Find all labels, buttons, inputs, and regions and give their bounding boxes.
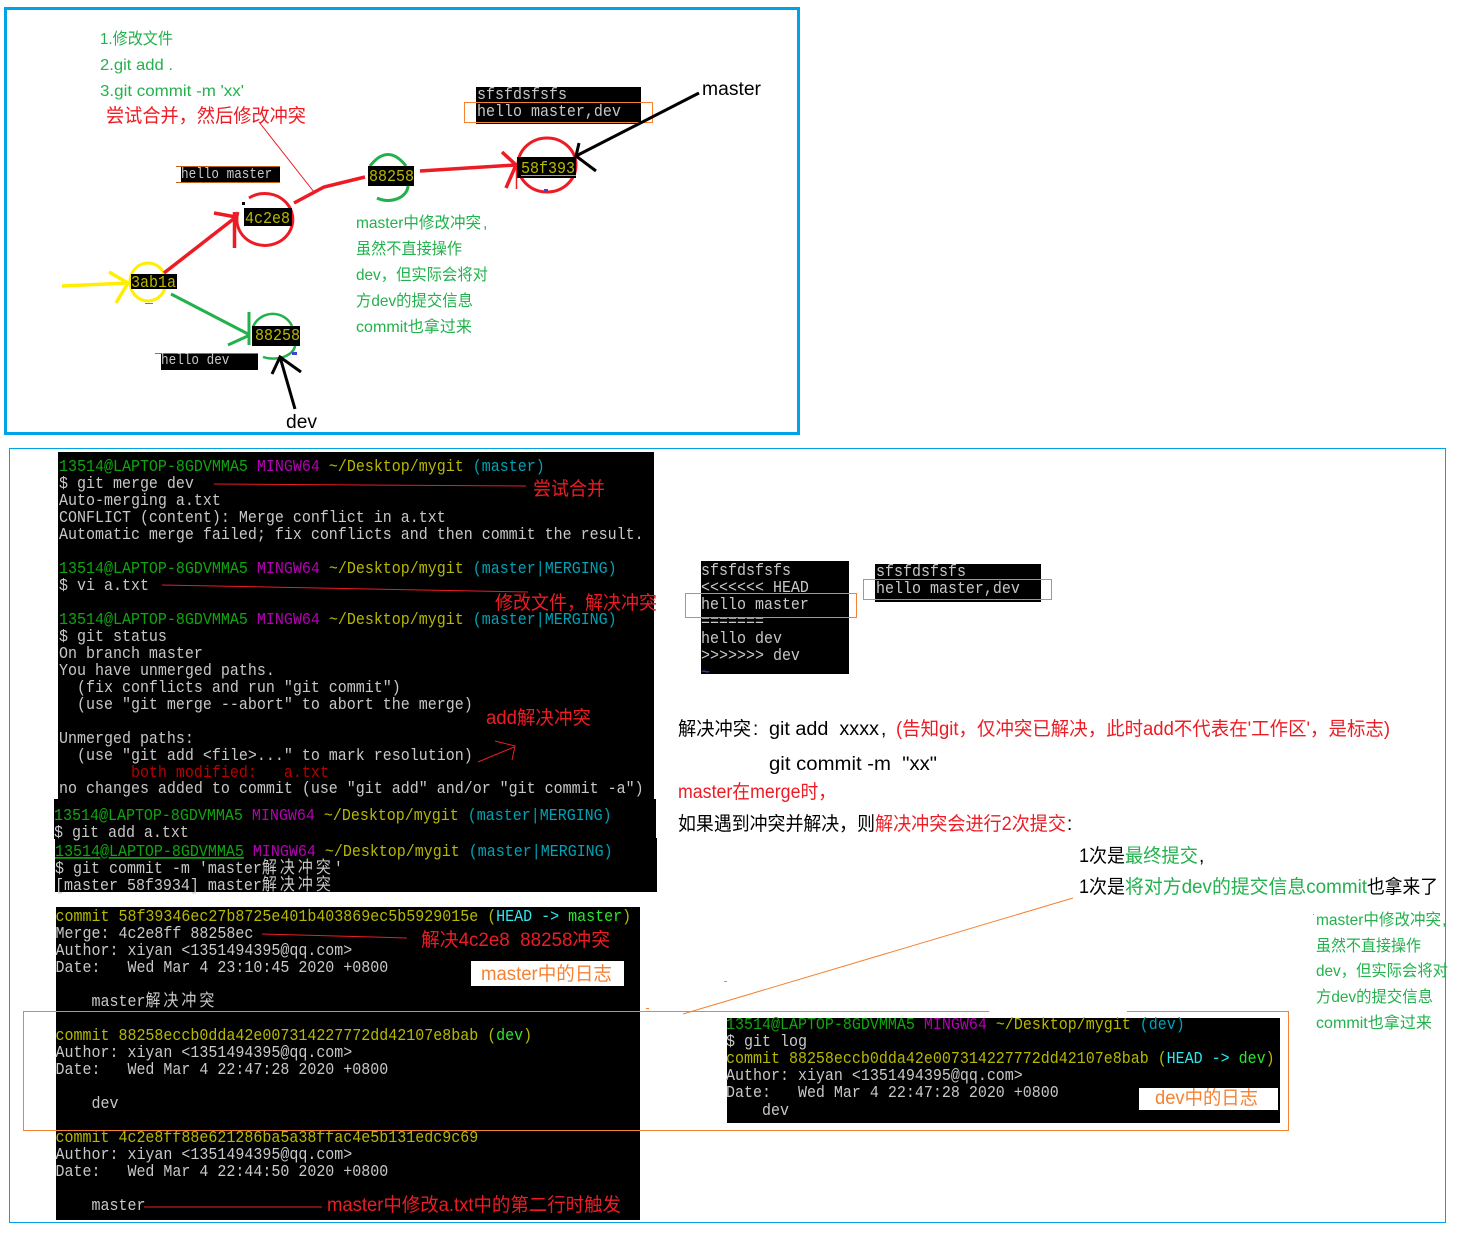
node: commit 3ab1a — [130, 263, 177, 304]
file content: conflict markers: >>>>>>> dev — [701, 646, 800, 665]
file content: conflict markers: sfsfdsfsfs — [701, 561, 791, 580]
file content: resolved result — [864, 562, 1052, 602]
text: master conflict note — [356, 214, 488, 336]
terminal: git merge and status: On branch master — [59, 644, 203, 663]
terminal: git merge and status — [58, 452, 654, 800]
annotation: resolves 4c2e8 and 88258 — [262, 929, 610, 951]
text: how to resolve: : — [753, 719, 758, 740]
terminal: master git log: Author: xiyan <1351494395@qq.com> — [56, 1145, 352, 1164]
text: two commits explanation: : — [1067, 814, 1072, 835]
text: master conflict note: 方dev的提交信息 — [356, 292, 473, 310]
file content: conflict markers: ======= — [701, 612, 764, 631]
terminal: master git log: master — [56, 1196, 145, 1215]
annotation: add resolves conflict — [478, 707, 591, 762]
terminal: git add and commit: 13514@LAPTOP-8GDVMMA5 MINGW64 ~/Desktop/mygit (master|MERGING) — [55, 842, 613, 861]
text: master conflict note repeated: , — [1442, 912, 1446, 929]
terminal: dev git log: 13514@LAPTOP-8GDVMMA5 MINGW64 ~/Desktop/mygit (dev) — [726, 1015, 1185, 1034]
arrow: red 4c2e8 to 88258 — [294, 177, 365, 203]
text: how to resolve — [678, 718, 1390, 775]
node: commit 4c2e8 — [237, 193, 293, 245]
text: workflow steps: 2.git add . — [100, 57, 173, 74]
file content: merged result: sfsfdsfsfs — [477, 85, 567, 104]
terminal: master git log: Date: Wed Mar 4 22:44:50 2020 +0800 — [56, 1162, 388, 1181]
terminal: git merge and status: $ git status — [59, 627, 167, 646]
text: two commits explanation: 也拿来了 — [1367, 875, 1438, 898]
text: master conflict note: master中修改冲突 — [356, 214, 481, 232]
terminal: git merge and status: (fix conflicts and run "git commit") — [59, 678, 401, 697]
file content: resolved result: sfsfdsfsfs — [876, 562, 966, 581]
text: two commits explanation: 如果遇到冲突并解决，则 — [678, 813, 875, 835]
file content: conflict markers — [686, 561, 856, 682]
text: workflow steps: 1.修改文件 — [100, 30, 173, 48]
terminal: git merge and status: $ git merge dev — [59, 474, 194, 493]
terminal: master git log: Date: Wed Mar 4 22:47:28 2020 +0800 — [56, 1060, 388, 1079]
arrow: red 88258 to 58f393 — [420, 152, 516, 189]
arrow: dev pointer — [272, 357, 301, 409]
arrow: green to dev commit — [171, 294, 250, 345]
arrow: red to 4c2e8 — [164, 212, 236, 273]
heading: try merge then fix conflict: 尝试合并，然后修改冲突 — [106, 105, 306, 127]
terminal: dev git log: Author: xiyan <1351494395@qq.com> — [726, 1066, 1023, 1085]
terminal: master git log: commit 88258eccb0dda42e007314227772dd42107e8bab (dev) — [56, 1026, 532, 1045]
text: two commits explanation — [678, 781, 1438, 898]
label: dev: dev — [286, 412, 317, 433]
annotation: edit file to fix conflict: 修改文件，解决冲突 — [495, 592, 657, 614]
text: master conflict note: , — [483, 215, 487, 232]
file content: conflict markers: <<<<<<< HEAD — [701, 578, 809, 597]
text: workflow steps: 3.git commit -m 'xx' — [100, 83, 244, 100]
connector: note to shared commit — [646, 898, 1314, 1014]
terminal: git add and commit: [master 58f3934] master解决冲突 — [55, 875, 334, 895]
text: two commits explanation: 最终提交 — [1125, 845, 1198, 867]
text: two commits explanation: , — [1199, 846, 1204, 867]
terminal: git merge and status: Automatic merge failed; fix conflicts and then commit the result. — [59, 525, 644, 544]
node: commit 4c2e8: 4c2e8 — [245, 209, 290, 228]
text: two commits explanation: master在merge时， — [678, 781, 836, 803]
terminal: dev git log: $ git log — [726, 1032, 807, 1051]
text: how to resolve: , — [881, 719, 886, 740]
node: commit 88258 on master — [368, 154, 414, 200]
annotation: add resolves conflict: add解决冲突 — [486, 707, 591, 729]
terminal: dev git log: Date: Wed Mar 4 22:47:28 2020 +0800 — [726, 1083, 1059, 1102]
text: two commits explanation: 1次是 — [1079, 845, 1125, 867]
terminal: git merge and status: Unmerged paths: — [59, 729, 194, 748]
node: commit 88258 on dev: 88258 — [255, 326, 300, 345]
terminal: master git log — [56, 907, 640, 1220]
arrow: master pointer — [576, 93, 699, 171]
text: two commits explanation: 将对方dev的提交信息commit — [1125, 876, 1368, 898]
text: how to resolve: 解决冲突 — [678, 718, 751, 740]
terminal: git merge and status: no changes added to commit (use "git add" and/or "git commit -a") — [59, 779, 644, 798]
terminal: git merge and status: CONFLICT (content): Merge conflict in a.txt — [59, 508, 446, 527]
text: how to resolve: git add xxxx — [769, 719, 880, 740]
callout line: merge note to commit path — [259, 122, 314, 192]
label: hello dev — [155, 352, 258, 370]
terminal: git merge and status: Auto-merging a.txt — [59, 491, 221, 510]
terminal: git merge and status: (use "git add <file>..." to mark resolution) — [59, 746, 473, 765]
node: commit 58f393 — [517, 138, 576, 192]
terminal: git merge and status: 13514@LAPTOP-8GDVMMA5 MINGW64 ~/Desktop/mygit (master|MERGING) — [59, 610, 617, 629]
terminal: master git log: master解决冲突 — [56, 991, 217, 1011]
terminal: dev git log: commit 88258eccb0dda42e007314227772dd42107e8bab (HEAD -> dev) — [726, 1049, 1275, 1068]
label: log in dev: dev中的日志 — [1155, 1087, 1258, 1109]
terminal: master git log: commit 58f39346ec27b8725e401b403869ec5b5929015e (HEAD -> master) — [56, 907, 631, 926]
text: master conflict note repeated: master中修改冲突 — [1316, 911, 1441, 929]
terminal: master git log: Date: Wed Mar 4 23:10:45 2020 +0800 — [56, 958, 388, 977]
text: master conflict note repeated: 方dev的提交信息 — [1316, 988, 1433, 1006]
terminal: master git log: dev — [56, 1094, 119, 1113]
terminal: dev git log — [726, 1015, 1280, 1123]
file content: resolved result: hello master,dev — [876, 579, 1020, 598]
file content: merged result — [464, 85, 652, 124]
text: master conflict note repeated: dev，但实际会将对 — [1316, 962, 1448, 980]
file content: merged result: hello master,dev — [477, 102, 621, 121]
file content: conflict markers: ~ — [701, 663, 710, 682]
terminal: git merge and status: 13514@LAPTOP-8GDVMMA5 MINGW64 ~/Desktop/mygit (master|MERGING) — [59, 559, 617, 578]
label: log in master: master中的日志 — [481, 963, 612, 985]
text: master conflict note: commit也拿过来 — [356, 317, 472, 336]
terminal: git add and commit: $ git add a.txt — [54, 823, 189, 842]
file content: conflict markers: hello dev — [701, 629, 782, 648]
terminal: git merge and status: (use "git merge --abort" to abort the merge) — [59, 695, 473, 714]
node: commit 88258 on master: 88258 — [369, 167, 414, 186]
annotation: edit file to fix conflict — [162, 585, 657, 614]
highlight box: shared dev commit — [24, 1012, 1288, 1130]
node: commit 88258 on dev — [252, 314, 300, 359]
terminal: git add and commit: 13514@LAPTOP-8GDVMMA5 MINGW64 ~/Desktop/mygit (master|MERGING) — [54, 806, 612, 825]
label: hello master: hello master — [181, 166, 272, 183]
terminal: git merge and status: 13514@LAPTOP-8GDVMMA5 MINGW64 ~/Desktop/mygit (master) — [59, 457, 545, 476]
text: how to resolve: git commit -m "xx" — [769, 754, 937, 775]
terminal: master git log: commit 4c2e8ff88e621286ba5a38ffac4e5b131edc9c69 — [56, 1128, 478, 1147]
node: commit 3ab1a: 3ab1a — [131, 273, 176, 292]
annotation: triggered by second line edit: master中修改a.txt中的第二行时触发 — [327, 1194, 621, 1216]
text: master conflict note repeated: 虽然不直接操作 — [1316, 937, 1421, 955]
text: master conflict note repeated: commit也拿过来 — [1316, 1013, 1432, 1032]
terminal: git add and commit — [54, 799, 657, 895]
node: commit 58f393: 58f393 — [521, 159, 575, 178]
terminal: git merge and status: You have unmerged paths. — [59, 661, 275, 680]
terminal: git add and commit: $ git commit -m 'master解决冲突' — [55, 858, 343, 878]
panel: commit graph diagram — [6, 8, 798, 434]
terminal: git merge and status: both modified: a.txt — [59, 763, 329, 782]
terminal: master git log: Author: xiyan <1351494395@qq.com> — [56, 941, 352, 960]
annotation: try merge: 尝试合并 — [533, 478, 605, 500]
label: hello dev: hello dev — [161, 352, 229, 369]
label: master: master — [702, 79, 762, 100]
file content: conflict markers: hello master — [701, 595, 809, 614]
text: how to resolve: (告知git，仅冲突已解决，此时add不代表在'工作区'，是标志) — [896, 718, 1390, 740]
arrow: yellow start pointer — [62, 272, 128, 303]
text: master conflict note: 虽然不直接操作 — [356, 240, 462, 258]
terminal: dev git log: dev — [726, 1101, 789, 1120]
text: two commits explanation: 1次是 — [1079, 876, 1125, 898]
text: master conflict note: dev，但实际会将对 — [356, 266, 488, 284]
annotation: resolves 4c2e8 and 88258: 解决4c2e8 88258冲突 — [421, 929, 610, 951]
terminal: master git log: Merge: 4c2e8ff 88258ec — [56, 924, 253, 943]
panel: resolve conflict walkthrough — [10, 448, 1448, 1222]
terminal: git merge and status: $ vi a.txt — [59, 576, 149, 595]
text: workflow steps — [100, 30, 244, 100]
text: master conflict note repeated — [1316, 911, 1448, 1032]
terminal: master git log: Author: xiyan <1351494395@qq.com> — [56, 1043, 352, 1062]
text: two commits explanation: 解决冲突会进行2次提交 — [875, 813, 1066, 835]
